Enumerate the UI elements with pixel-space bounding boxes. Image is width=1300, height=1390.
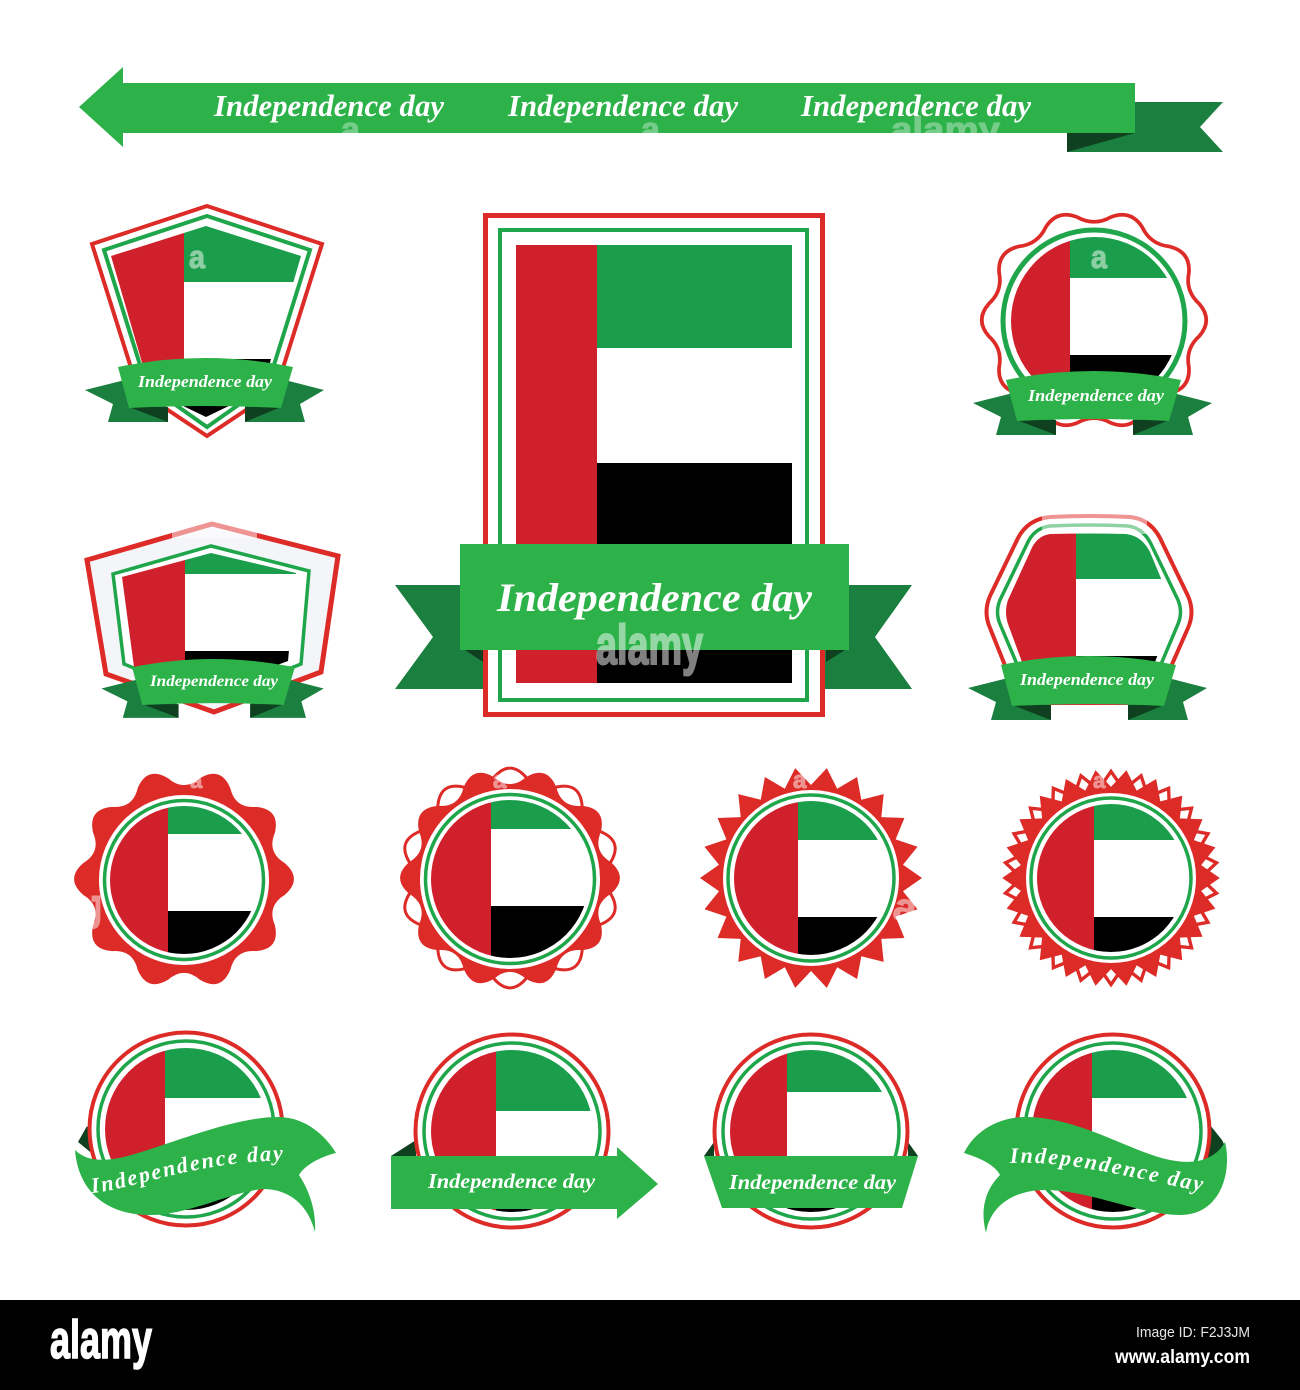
ribbon band bbox=[460, 544, 849, 650]
watermark fragments: J bbox=[86, 886, 102, 938]
watermark fragment on shield top bbox=[172, 518, 257, 538]
watermark fragments bbox=[86, 768, 203, 938]
banner text 2: Independence day bbox=[507, 88, 738, 123]
watermark letter: a bbox=[189, 239, 205, 275]
trapezoid ribbon bbox=[704, 1156, 918, 1208]
ribbon text: Independence day bbox=[427, 1169, 596, 1193]
top arrow ribbon banner bbox=[79, 67, 1223, 152]
flag in circle bbox=[105, 1048, 261, 1210]
ribbon tails bbox=[395, 585, 490, 689]
ribbon text: Independence day bbox=[149, 673, 279, 690]
footer bar bbox=[0, 1300, 1300, 1390]
flag in circle bbox=[431, 1050, 590, 1212]
flag bbox=[516, 245, 792, 683]
flag in hexagon bbox=[1006, 533, 1162, 662]
banner text 3: Independence day bbox=[800, 88, 1031, 123]
ribbon text on curve: Independence day bbox=[92, 1146, 283, 1193]
banner watermark fragments: a bbox=[641, 111, 661, 149]
ribbon bbox=[101, 659, 324, 718]
flag in circle bbox=[1037, 804, 1174, 952]
ribbon bbox=[968, 656, 1207, 720]
watermark fragments: a bbox=[190, 768, 203, 793]
watermark fragments: a bbox=[793, 767, 807, 794]
badge: large central rectangular flag bbox=[395, 216, 912, 714]
flag in circle bbox=[1033, 1050, 1187, 1212]
flag in circle bbox=[1011, 237, 1172, 376]
watermark fragments: a bbox=[889, 884, 922, 933]
waving ribbon bbox=[964, 1117, 1227, 1233]
ribbon bbox=[973, 371, 1212, 435]
flag in circle bbox=[730, 1050, 882, 1212]
watermark fragments bbox=[793, 767, 922, 933]
image id: Image ID: F2J3JM bbox=[1136, 1324, 1250, 1341]
badge: red double starburst seal bbox=[1002, 768, 1220, 986]
badge: red starburst seal bbox=[700, 767, 922, 988]
ribbon bbox=[85, 358, 324, 422]
footer logo: alamy bbox=[50, 1310, 152, 1370]
ribbon folds bbox=[465, 650, 483, 662]
banner watermark fragments: a bbox=[341, 111, 361, 149]
watermark fragment: a bbox=[1093, 768, 1106, 793]
banner watermark fragments bbox=[341, 111, 1000, 149]
ribbon text: Independence day bbox=[728, 1170, 897, 1194]
flag in circle bbox=[734, 801, 878, 955]
badge: red wavy seal with interlaced outline bbox=[400, 766, 620, 990]
badge: rounded hexagon second row right bbox=[968, 512, 1207, 720]
badge: circle with waving ribbon to the left bbox=[964, 1032, 1228, 1233]
badge: wide shield second row left bbox=[87, 518, 338, 718]
badge: scalloped outline top right bbox=[973, 215, 1212, 435]
flag in shield bbox=[122, 553, 296, 667]
flag in circle bbox=[110, 806, 252, 954]
watermark: alamy bbox=[596, 613, 703, 676]
badge: circle with waving ribbon to the right bbox=[75, 1030, 336, 1232]
ribbon text: Independence day bbox=[1027, 386, 1165, 405]
badge: shield top left bbox=[85, 206, 324, 436]
ribbon text on curve: Independence day bbox=[1010, 1148, 1204, 1194]
flag in shield bbox=[111, 226, 301, 417]
flag in circle bbox=[431, 800, 584, 958]
ribbon text: Independence day bbox=[496, 575, 812, 620]
waving ribbon bbox=[75, 1117, 336, 1232]
watermark fragment on hexagon top bbox=[1042, 512, 1147, 534]
banner watermark fragments: alamy bbox=[891, 111, 1000, 149]
badge: red wavy seal bbox=[74, 768, 294, 984]
website: www.alamy.com bbox=[1114, 1347, 1250, 1368]
watermark letter: a bbox=[1091, 239, 1107, 275]
banner text 1: Independence day bbox=[213, 88, 444, 123]
watermark fragment: a bbox=[493, 767, 507, 794]
ribbon text: Independence day bbox=[137, 372, 273, 391]
ribbon text: Independence day bbox=[1019, 670, 1155, 689]
arrow ribbon bbox=[391, 1147, 658, 1219]
badge: circle with straight trapezoid ribbon bbox=[704, 1034, 918, 1228]
badge: circle with arrow ribbon bbox=[391, 1034, 658, 1228]
